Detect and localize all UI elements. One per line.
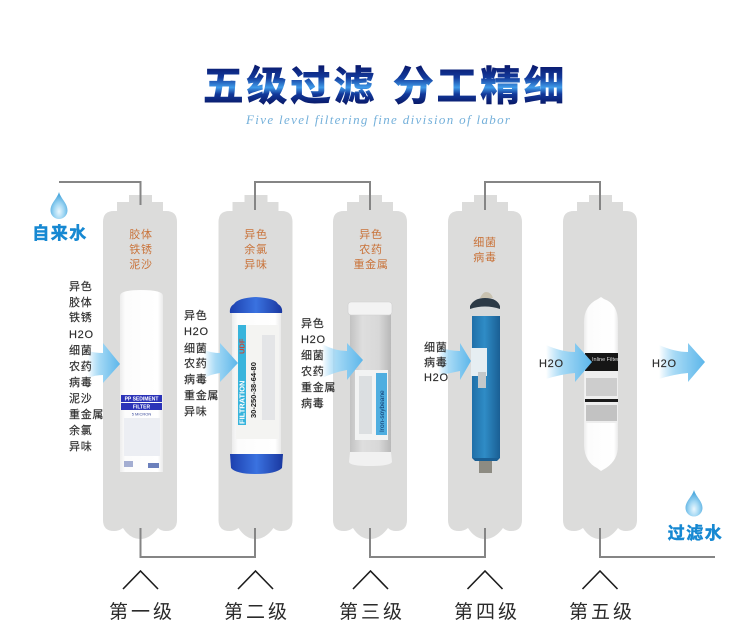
- input list stage 1: H2O: [69, 329, 94, 341]
- arrow: output: [659, 343, 705, 382]
- removed by stage 2: 异味: [244, 258, 268, 271]
- filter 5: inline post carbon: Inline Filter: [592, 357, 619, 363]
- removed by stage 2: 异色: [244, 227, 268, 241]
- input list stage 4: H2O: [424, 372, 449, 384]
- pipe: tap water inlet: [59, 182, 140, 205]
- input list stage 3: 农药: [301, 364, 324, 378]
- removed by stage 3: 农药: [359, 242, 383, 256]
- removed by stage 2: [244, 227, 268, 271]
- filter 2: granular activated carbon: FILTRATION: [238, 381, 246, 424]
- title: 五级过滤: [203, 63, 377, 109]
- input list stage 3: 异色: [301, 316, 324, 330]
- input list stage 1: 重金属: [69, 407, 104, 421]
- input list stage 3: 细菌: [301, 349, 324, 362]
- input list stage 3: 病毒: [301, 396, 324, 410]
- tap water label: 自来水: [32, 223, 88, 243]
- filter 2: granular activated carbon: UDF: [238, 338, 246, 354]
- input list stage 1: 胶体: [69, 295, 92, 309]
- pipe: filtered water outlet: [600, 528, 715, 557]
- input list stage 1: 铁锈: [69, 311, 92, 324]
- removed by stage 4: [473, 236, 497, 264]
- removed by stage 3: 异色: [359, 227, 383, 241]
- input list stage 2: 异味: [184, 405, 207, 418]
- stage 3 marker: [339, 571, 405, 621]
- removed by stage 1: [129, 227, 153, 271]
- filter 5: inline post carbon: [584, 297, 619, 471]
- input list stage 4: 病毒: [424, 355, 447, 369]
- filter 1: PP sediment: PP SEDIMENT: [125, 396, 158, 402]
- housing: stage 2: [218, 195, 292, 539]
- input list stage 5: H2O: [539, 358, 564, 370]
- housing: stage 5: [563, 195, 637, 539]
- subtitle: Five level filtering fine division of labor: [245, 112, 511, 127]
- removed by stage 1: 泥沙: [129, 258, 153, 271]
- input list stage 1: 余氯: [69, 423, 92, 437]
- input list stage 1: 异色: [69, 279, 92, 293]
- filter 3: carbon block: [348, 302, 392, 466]
- stage 2 marker: [224, 571, 290, 621]
- filter 2: granular activated carbon: [230, 297, 283, 474]
- input list stage 3: H2O: [301, 334, 326, 346]
- removed by stage 3: [353, 227, 389, 271]
- output label: H2O: [652, 358, 677, 370]
- input list stage 1: 病毒: [69, 375, 92, 389]
- input list stage 2: 农药: [184, 356, 207, 370]
- input list stage 2: 重金属: [184, 388, 219, 402]
- input list stage 4: [424, 341, 449, 384]
- title: 分工精细: [393, 63, 567, 109]
- filter 1: PP sediment: FILTER: [133, 404, 150, 410]
- filter 3: carbon block: Iron-soybeane: [379, 390, 386, 432]
- input list stage 1: 异味: [69, 440, 92, 453]
- pipe: stage 4 to 5: [485, 182, 600, 210]
- removed by stage 4: 病毒: [473, 250, 497, 264]
- stage 5 marker: [569, 571, 635, 621]
- input list stage 4: 细菌: [424, 341, 447, 354]
- removed by stage 4: 细菌: [473, 236, 497, 249]
- pipe: stage 3 to 4: [370, 528, 485, 557]
- arrow into stage 4: [438, 343, 471, 380]
- input list stage 2: 病毒: [184, 372, 207, 386]
- filter 2: granular activated carbon: 30-250-38-64-80: [249, 362, 258, 418]
- arrow into stage 2: [204, 343, 238, 382]
- filter 1: PP sediment: 5 MICRON: [132, 412, 151, 416]
- removed by stage 2: 余氯: [244, 242, 268, 256]
- icon: tap water drop: [50, 192, 68, 219]
- stage 1 marker: [109, 571, 175, 621]
- input list stage 2: 异色: [184, 308, 207, 322]
- input list stage 2: H2O: [184, 326, 209, 338]
- housing: stage 4: [448, 195, 522, 539]
- filter 1: PP sediment: [120, 290, 163, 472]
- filtered water label: 过滤水: [668, 524, 723, 543]
- icon: filtered water drop: [686, 490, 702, 516]
- arrow into stage 1: [88, 343, 120, 383]
- input list stage 2: [184, 308, 219, 418]
- input list stage 3: 重金属: [301, 380, 336, 394]
- input list stage 1: 泥沙: [69, 392, 92, 405]
- title: [203, 63, 567, 109]
- input list stage 1: 细菌: [69, 344, 92, 357]
- input list stage 1: [69, 279, 104, 453]
- input list stage 2: 细菌: [184, 342, 207, 355]
- housing: stage 1: [103, 195, 177, 539]
- stage 4 marker: [454, 571, 520, 621]
- pipe: stage 1 to 2: [140, 528, 255, 557]
- arrow into stage 3: [322, 343, 363, 380]
- removed by stage 1: 铁锈: [129, 243, 153, 256]
- input list stage 3: [301, 316, 336, 410]
- pipe: stage 2 to 3: [255, 182, 370, 210]
- input list stage 1: 农药: [69, 359, 92, 373]
- removed by stage 3: 重金属: [353, 257, 389, 271]
- arrow into stage 5: [546, 343, 592, 382]
- housing: stage 3: [333, 195, 407, 539]
- removed by stage 1: 胶体: [129, 227, 153, 241]
- filter 4: RO membrane: [470, 292, 500, 473]
